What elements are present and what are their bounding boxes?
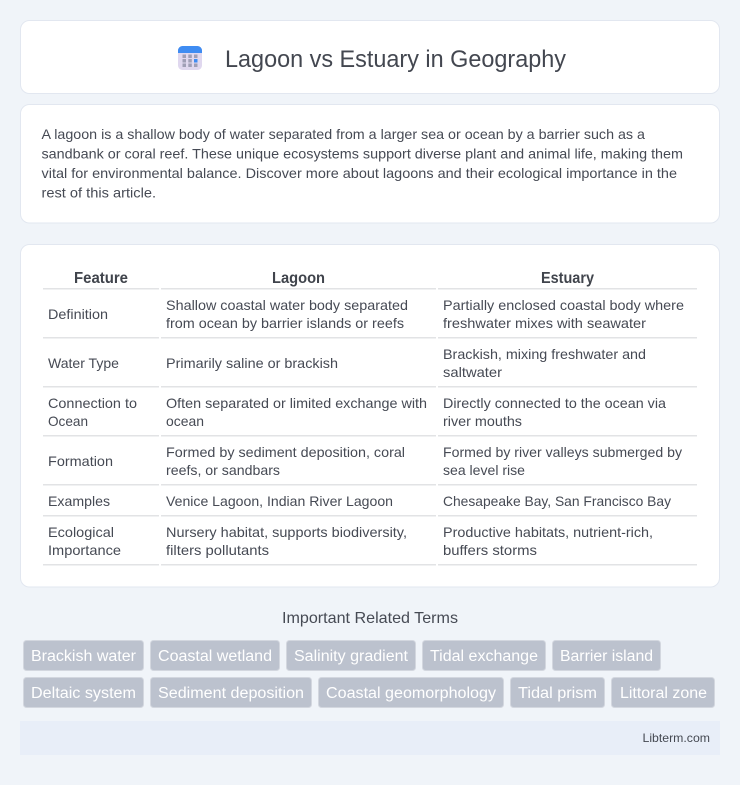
row: formation: [48, 444, 682, 478]
footer: [20, 721, 720, 755]
row: connection to ocean: river mouths: [443, 413, 522, 429]
row: definition: Shallow coastal water body separated: [166, 297, 408, 313]
related term chips: Sediment deposition: [158, 685, 304, 702]
row: formation: Formed by river valleys submerged by: [443, 444, 682, 460]
related term chips: [24, 640, 714, 708]
table header row: [74, 270, 594, 287]
title: Lagoon vs Estuary in Geography: [225, 46, 566, 73]
row: definition: Definition: [48, 306, 108, 322]
row: connection to ocean: Directly connected to the ocean via: [443, 395, 666, 411]
related term chips: Deltaic system: [31, 685, 136, 702]
row: ecological importance: [48, 524, 653, 558]
row: formation: sea level rise: [443, 462, 525, 478]
related term chips: Tidal exchange: [430, 648, 538, 665]
table header row: Feature: [74, 270, 128, 287]
panel: intro paragraph: [20, 104, 720, 223]
icon: calendar: [178, 46, 202, 70]
row: ecological importance: filters pollutants: [166, 542, 269, 558]
row: ecological importance: buffers storms: [443, 542, 537, 558]
related term chips: Barrier island: [560, 648, 653, 665]
row: formation: Formed by sediment deposition, coral: [166, 444, 405, 460]
panel: header: [20, 20, 720, 94]
row: examples: [48, 493, 671, 509]
panel: comparison table: [20, 244, 720, 587]
row: examples: Chesapeake Bay, San Francisco Bay: [443, 493, 671, 509]
row: formation: reefs, or sandbars: [166, 462, 280, 478]
related term chips: Tidal prism: [518, 685, 597, 702]
heading: related terms: Important Related Terms: [282, 610, 458, 627]
row: water type: saltwater: [443, 364, 502, 380]
row: ecological importance: Productive habitats, nutrient-rich,: [443, 524, 653, 540]
table header row: Lagoon: [272, 270, 325, 287]
row: water type: Brackish, mixing freshwater and: [443, 346, 646, 362]
row: definition: Partially enclosed coastal body where: [443, 297, 684, 313]
related term chips: Salinity gradient: [294, 648, 409, 665]
row: connection to ocean: Connection to: [48, 395, 137, 411]
footer: Libterm.com: [642, 731, 710, 745]
row: examples: Venice Lagoon, Indian River Lagoon: [166, 493, 393, 509]
row: ecological importance: Ecological: [48, 524, 114, 540]
row: formation: Formation: [48, 453, 113, 469]
related term chips: Coastal geomorphology: [326, 685, 496, 702]
row: definition: from ocean by barrier islands or reefs: [166, 315, 404, 331]
intro text: [42, 126, 683, 200]
related term chips: Littoral zone: [620, 685, 707, 702]
row: definition: freshwater mixes with seawater: [443, 315, 646, 331]
row: water type: Water Type: [48, 355, 119, 371]
intro text: vital for environmental balance. Discover more about lagoons and their ecological importance in the: [42, 165, 677, 181]
row: connection to ocean: Ocean: [48, 413, 88, 429]
row: water type: Primarily saline or brackish: [166, 355, 338, 371]
intro text: A lagoon is a shallow body of water separated from a larger sea or ocean by a barrier such as a: [42, 126, 645, 142]
table header row: Estuary: [541, 270, 594, 287]
row: connection to ocean: ocean: [166, 413, 204, 429]
intro text: rest of this article.: [42, 184, 156, 200]
row: ecological importance: Importance: [48, 542, 121, 558]
related term chips: Coastal wetland: [158, 648, 272, 665]
row: examples: Examples: [48, 493, 110, 509]
intro text: sandbank or coral reef. These unique ecosystems support diverse plant and animal life, making them: [42, 146, 683, 162]
row: water type: [48, 346, 646, 380]
row: definition: [48, 297, 684, 331]
row: ecological importance: Nursery habitat, supports biodiversity,: [166, 524, 407, 540]
related term chips: Brackish water: [31, 648, 136, 665]
row: connection to ocean: [48, 395, 666, 429]
row: connection to ocean: Often separated or limited exchange with: [166, 395, 427, 411]
